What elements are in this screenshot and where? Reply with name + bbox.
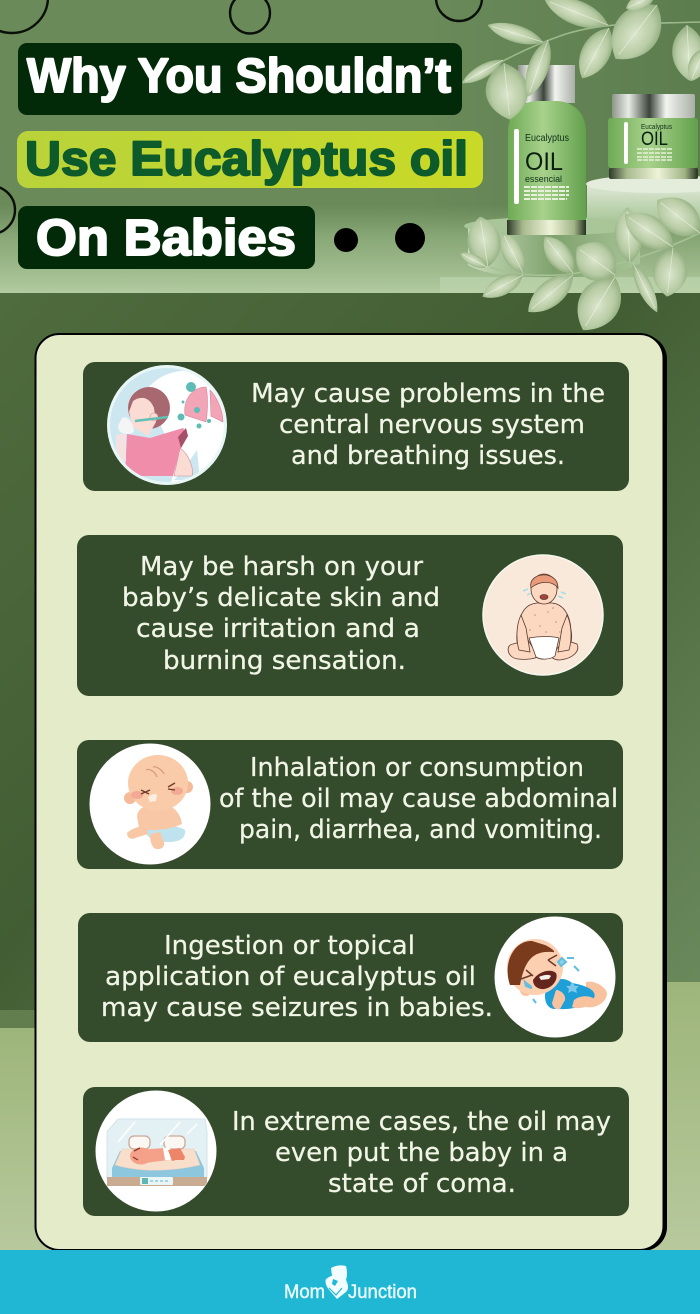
text: card 3: of the oil may cause abdominal (219, 784, 618, 814)
hanging leaves over bottle (483, 37, 558, 122)
text: card 1: central nervous system (279, 410, 585, 440)
bottle: Eucalyptus oil essencial: OIL (525, 148, 563, 176)
text: card 5: In extreme cases, the oil may (232, 1107, 611, 1137)
bottle: Eucalyptus oil essencial (507, 65, 586, 235)
text: card 4 (101, 931, 493, 1023)
text: card 5: state of coma. (328, 1169, 516, 1199)
text: card 5 (232, 1107, 611, 1199)
bottle: Eucalyptus oil essencial: essencial (525, 174, 562, 185)
text: card 2 (122, 552, 440, 676)
text: card 2: May be harsh on your (140, 552, 424, 582)
title: line 1: Why You Shouldn’t (27, 50, 451, 103)
text: card 2: baby’s delicate skin and (122, 583, 440, 613)
icon: baby with rash (483, 555, 603, 675)
icon: unwell baby (90, 744, 210, 864)
product illustration: eucalyptus bottles and leaves (440, 0, 700, 341)
text: card 4: application of eucalyptus oil (105, 962, 476, 992)
text: card 3 (219, 753, 618, 845)
text: card 4: Ingestion or topical (164, 931, 415, 961)
card 5: coma (83, 1087, 629, 1216)
text: card 3: pain, diarrhea, and vomiting. (239, 815, 602, 845)
jar: Eucalyptus oil: OIL (641, 129, 668, 150)
text: card 1: May cause problems in the (251, 379, 605, 409)
text: card 3: Inhalation or consumption (250, 753, 584, 783)
upper branch (459, 0, 700, 89)
right pedestal (586, 175, 700, 226)
card 1: nervous system and breathing (83, 362, 629, 491)
text: card 2: burning sensation. (163, 646, 406, 676)
text: card 4: may cause seizures in babies. (101, 993, 493, 1023)
logo: MomJunction: Junction (348, 1282, 417, 1303)
lower pedestal (440, 217, 700, 293)
logo: MomJunction: Mom (284, 1282, 325, 1303)
panel: reasons (36, 334, 667, 1251)
jar: Eucalyptus oil: Eucalyptus (641, 124, 672, 131)
decorative dots (334, 223, 425, 253)
text: card 2: cause irritation and a (136, 614, 420, 644)
text: card 1 (251, 379, 605, 471)
decorative circle outlines (0, 0, 482, 234)
jar: Eucalyptus oil (608, 94, 698, 179)
lower branch (458, 186, 700, 341)
icon: baby with nebulizer and lungs (107, 365, 230, 485)
text: card 1: and breathing issues. (291, 441, 565, 471)
icon: baby in incubator (96, 1090, 216, 1212)
bottle: Eucalyptus oil essencial: Eucalyptus (525, 133, 569, 144)
footer band (0, 1250, 700, 1314)
title: line 2: Use Eucalyptus oil (25, 133, 468, 186)
title: line 3: On Babies (36, 209, 296, 266)
card 3: abdominal pain (77, 740, 623, 869)
icon: crying baby (494, 916, 616, 1038)
logo: MomJunction (284, 1265, 417, 1303)
text: card 5: even put the baby in a (275, 1138, 568, 1168)
card 2: skin irritation (77, 535, 623, 696)
card 4: seizures (78, 913, 623, 1042)
